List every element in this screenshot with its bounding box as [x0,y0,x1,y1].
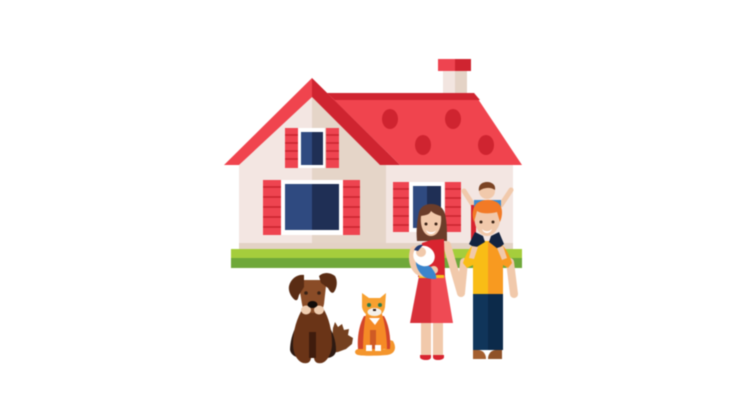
right window [393,182,461,232]
man with child on shoulders [461,182,514,359]
gable roof [224,78,400,165]
woman with baby [409,204,461,360]
upper window [285,128,339,168]
chimney [438,59,471,94]
dog [289,273,353,363]
house walls [239,95,513,250]
main roof [327,93,522,165]
cat [355,293,395,356]
large window [263,180,360,235]
lawn [231,249,522,268]
